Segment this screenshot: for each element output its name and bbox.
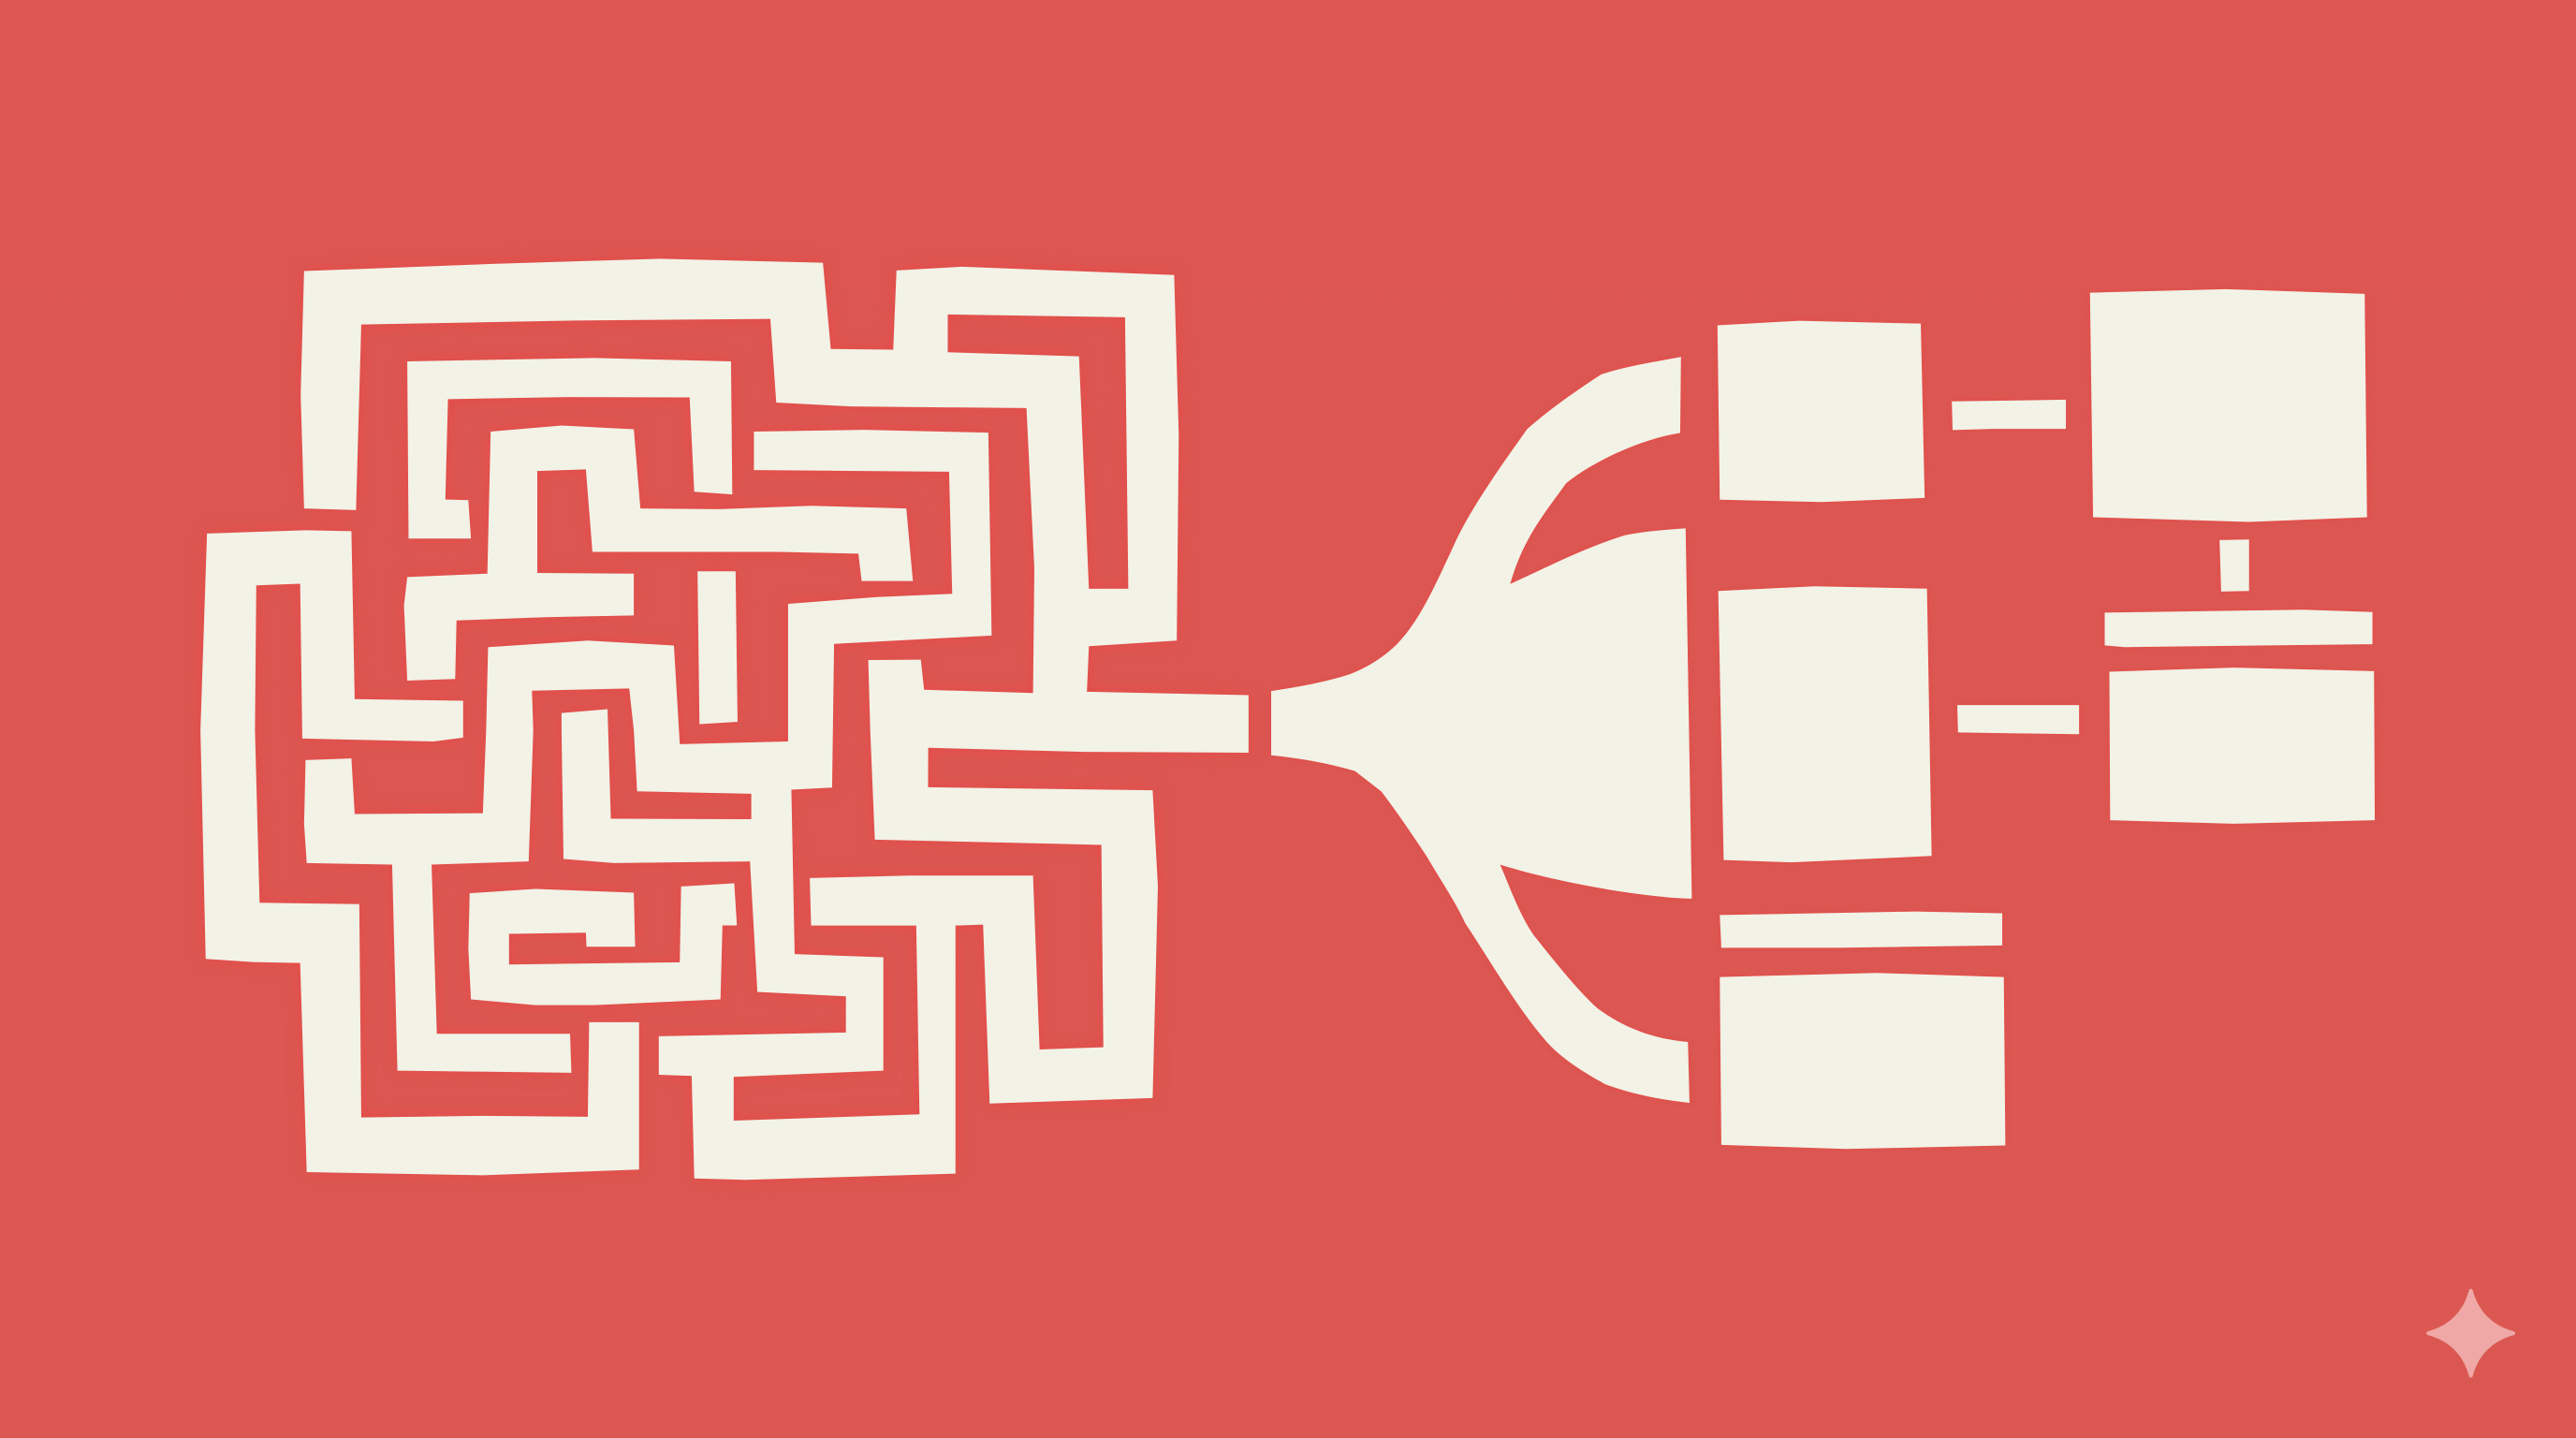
box: middle right: [2109, 668, 2375, 824]
maze upper inner corridor: [407, 358, 732, 538]
bar: lower: [1720, 912, 2002, 947]
box: middle: [1719, 586, 1932, 862]
box: top: [1718, 321, 1925, 502]
diagram blocks: [1718, 289, 2375, 1149]
maze: [200, 258, 1249, 1180]
funnel branching flow: [1271, 357, 1691, 1103]
connector: middle horizontal: [1957, 705, 2079, 734]
bar: right: [2105, 609, 2373, 647]
connector: top horizontal: [1952, 400, 2066, 430]
box: top right: [2090, 289, 2367, 522]
icon: four-point sparkle: [2428, 1291, 2513, 1375]
maze spiral: [468, 884, 737, 1005]
connector: vertical: [2219, 539, 2249, 592]
maze central corridor: [404, 426, 913, 681]
maze left corridor: [200, 530, 639, 1175]
maze vertical strip: [697, 571, 738, 724]
maze main corridor: [300, 258, 1249, 1180]
box: bottom: [1720, 973, 2005, 1149]
